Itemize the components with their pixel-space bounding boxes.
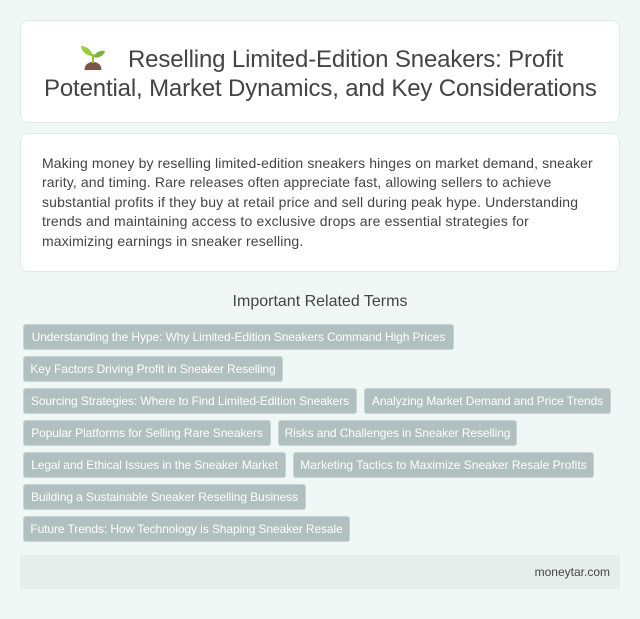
tag list: Marketing Tactics to Maximize Sneaker Resale Profits bbox=[300, 458, 587, 472]
summary paragraph bbox=[42, 155, 593, 249]
tag list: Key Factors Driving Profit in Sneaker Reselling bbox=[30, 362, 276, 376]
summary paragraph: maximizing earnings in sneaker reselling. bbox=[42, 233, 303, 249]
title line 2: Potential, Market Dynamics, and Key Considerations bbox=[44, 75, 597, 102]
tag list: Analyzing Market Demand and Price Trends bbox=[372, 394, 603, 408]
tag list: Risks and Challenges in Sneaker Reselling bbox=[285, 426, 510, 440]
tag list: Legal and Ethical Issues in the Sneaker Market bbox=[31, 458, 278, 472]
tag list: Building a Sustainable Sneaker Reselling Business bbox=[31, 490, 298, 504]
panel: title card bbox=[20, 20, 620, 123]
tag list: Understanding the Hype: Why Limited-Edition Sneakers Command High Prices bbox=[32, 330, 445, 344]
summary paragraph: Making money by reselling limited-edition sneakers hinges on market demand, sneaker bbox=[42, 155, 593, 171]
summary paragraph: substantial profits if they buy at retail price and sell during peak hype. Understanding bbox=[42, 194, 578, 210]
tag list: Sourcing Strategies: Where to Find Limited-Edition Sneakers bbox=[31, 394, 349, 408]
title line 1: Reselling Limited-Edition Sneakers: Profit bbox=[128, 46, 563, 73]
tag list bbox=[23, 324, 611, 542]
panel: summary card bbox=[20, 133, 620, 272]
icon: seedling bbox=[81, 46, 105, 70]
summary paragraph: rarity, and timing. Rare releases often appreciate fast, allowing sellers to achieve bbox=[42, 174, 551, 190]
footer source: moneytar.com bbox=[535, 565, 610, 579]
tag list: Popular Platforms for Selling Rare Sneakers bbox=[31, 426, 263, 440]
footer bar bbox=[20, 555, 620, 589]
heading: important related terms: Important Related Terms bbox=[233, 293, 407, 310]
summary paragraph: trends and maintaining access to exclusive drops are essential strategies for bbox=[42, 213, 529, 229]
tag list: Future Trends: How Technology is Shaping Sneaker Resale bbox=[30, 522, 343, 536]
